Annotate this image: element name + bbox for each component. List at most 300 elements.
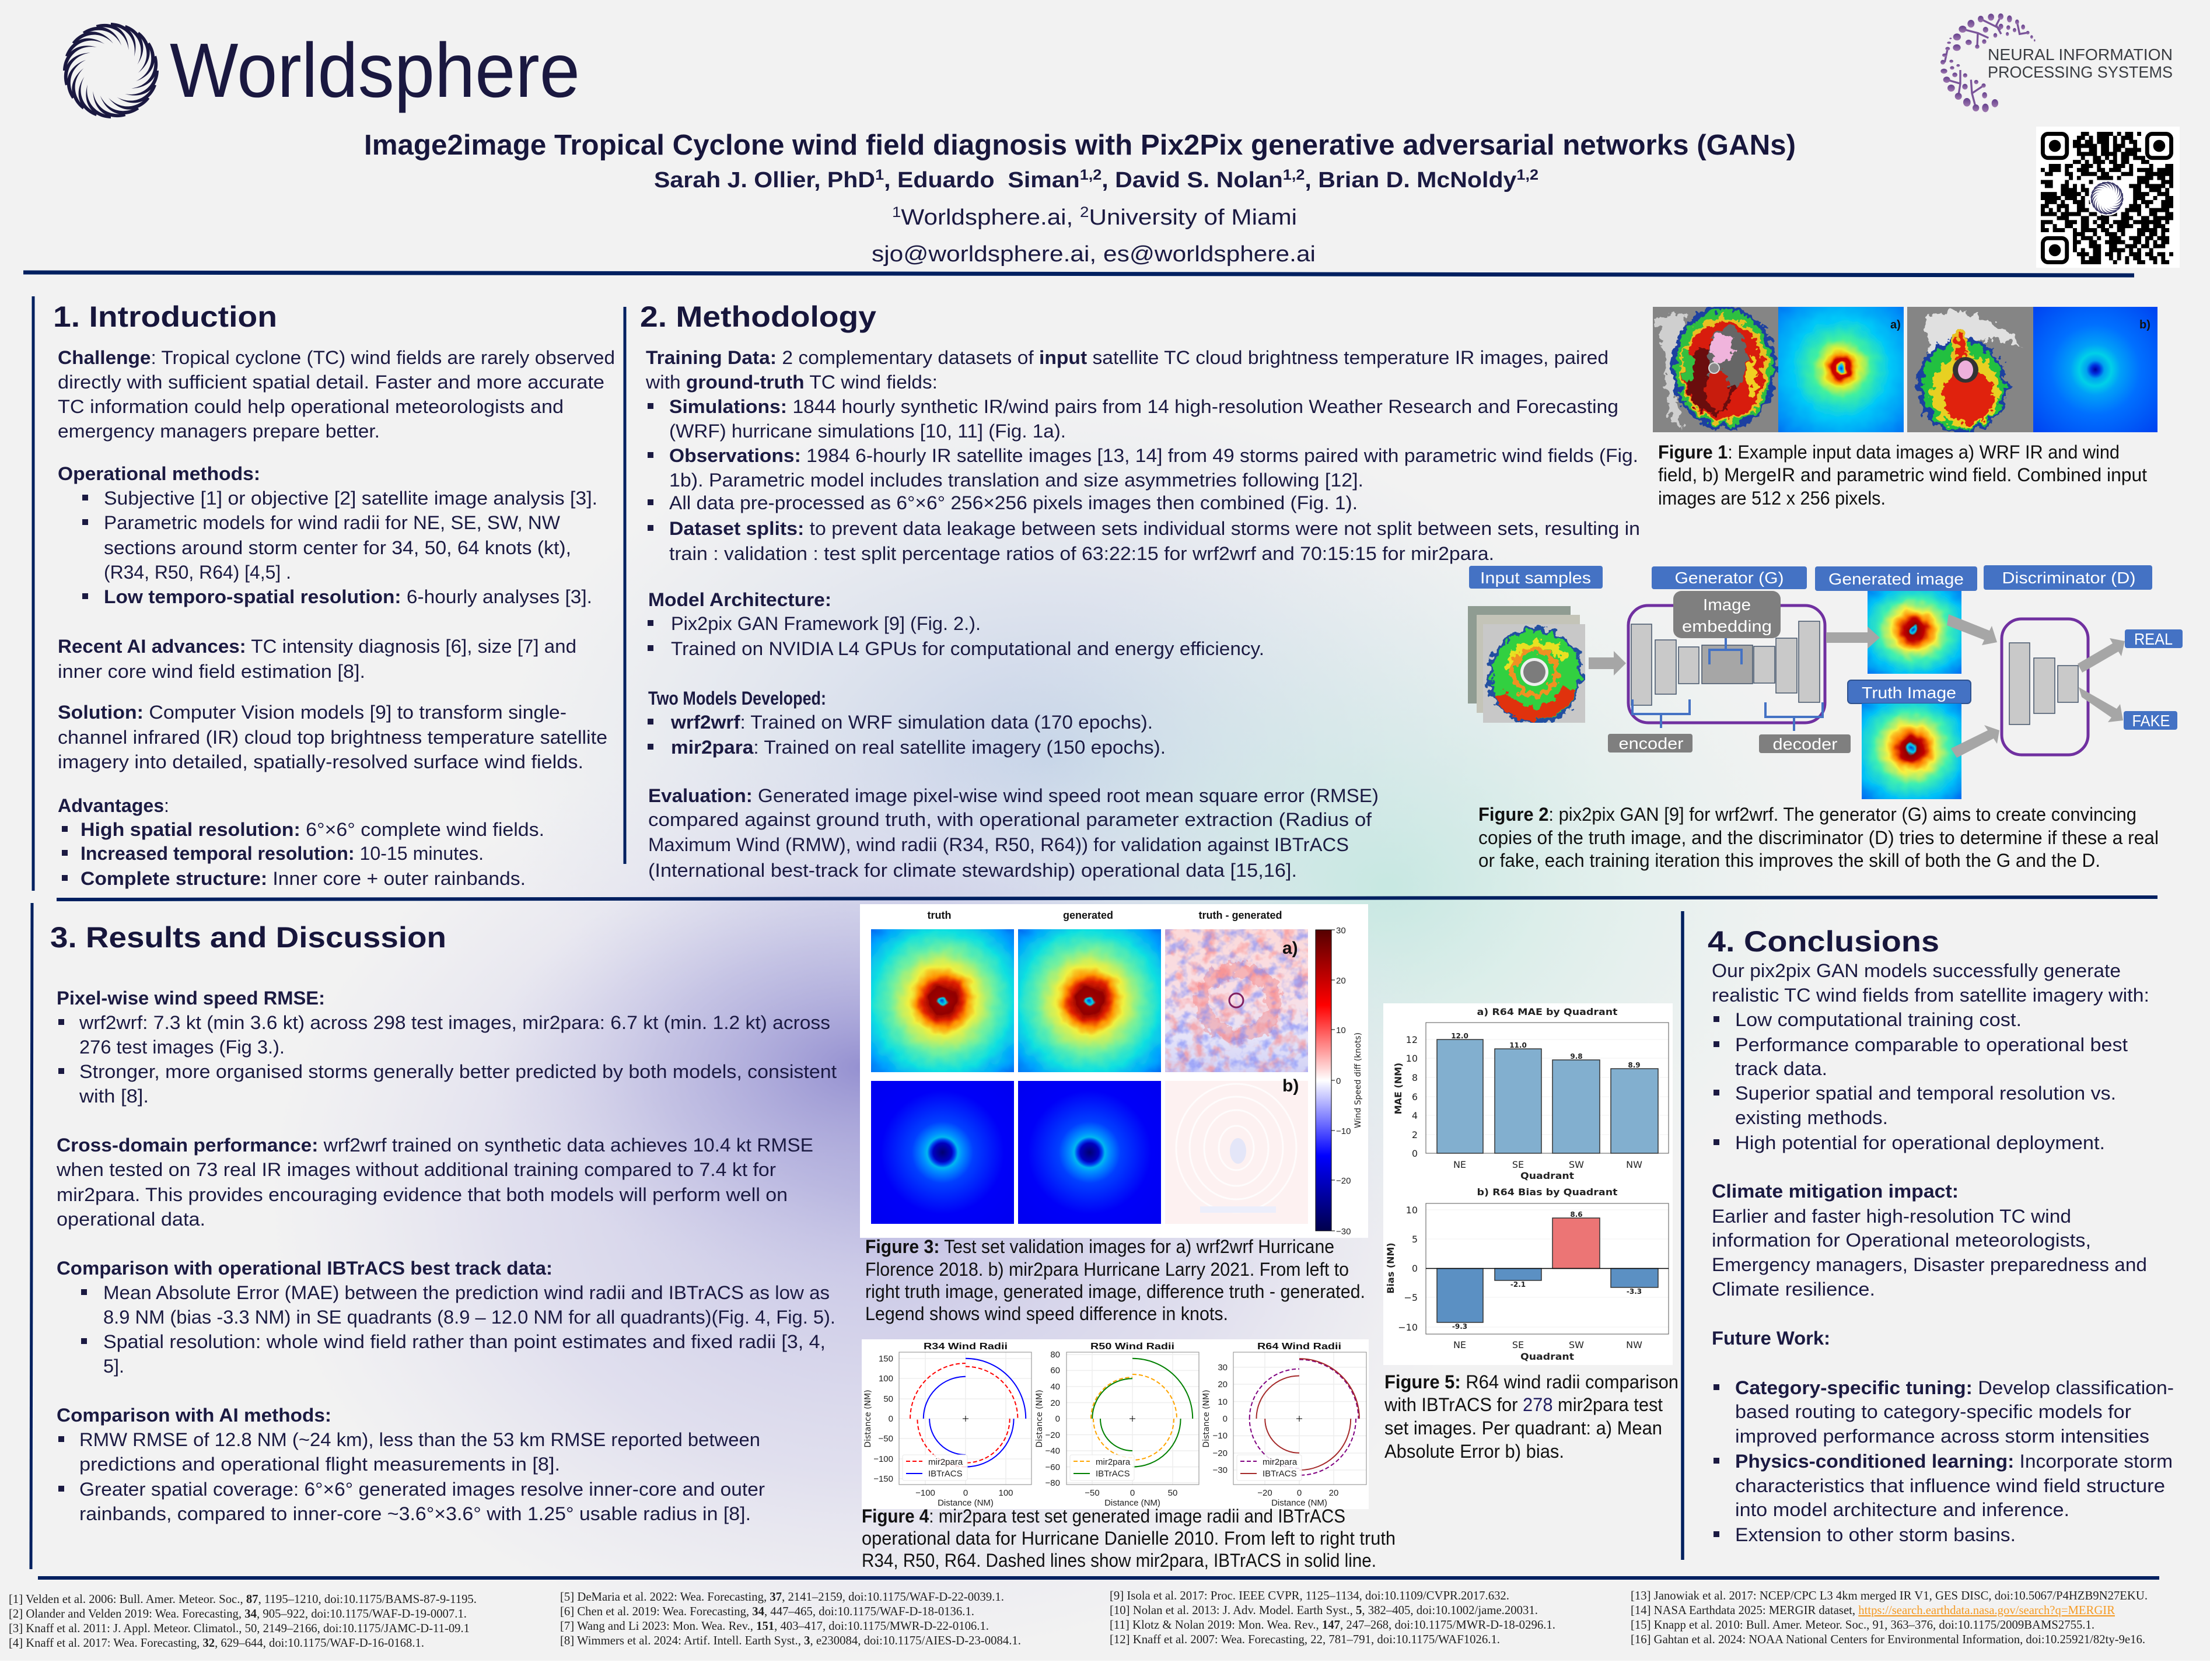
image: input samples stack <box>1468 606 1585 723</box>
text: operational methods: Low temporo-spatial resolution: 6-hourly analyses [3]. <box>104 586 592 607</box>
QR code <box>2036 127 2185 268</box>
image: a) difference <box>1165 929 1308 1072</box>
caption: figure 5: with IBTrACS for 278 mir2para test <box>1384 1394 1663 1415</box>
chart: R34 wind radii: IBTrACS <box>928 1469 963 1479</box>
chart: R64 wind radii: 20 <box>1329 1488 1338 1498</box>
chart: R64 bias by quadrant: 10 <box>1406 1205 1418 1216</box>
caption: figure 2: or fake, each training iteration this improves the skill of both the G and the D. <box>1478 850 2100 871</box>
colorbar: −10 <box>1336 1126 1351 1136</box>
chart: R64 wind radii <box>1202 1342 1366 1508</box>
authors: Sarah J. Ollier, PhD <box>654 168 859 192</box>
label: discriminator: Discriminator (D) <box>2002 569 2135 587</box>
image: a) truth <box>871 929 1014 1072</box>
panel label b: b) <box>1282 1076 1299 1096</box>
text: solution: channel infrared (IR) cloud top brightness temperature satellite <box>58 727 607 748</box>
label: generated image: Generated image <box>1828 570 1964 588</box>
logo: Neural Information Processing Systems: NEURAL INFORMATION <box>1988 46 2173 64</box>
chart: R34 wind radii: 100 <box>879 1374 893 1384</box>
authors: , Brian D. McNoldy <box>1305 168 1516 192</box>
chart: R50 wind radii: 60 <box>1050 1366 1060 1376</box>
references: column 2 <box>560 1590 1021 1647</box>
caption: figure 1: field, b) MergeIR and parametric wind field. Combined input <box>1658 464 2147 485</box>
affiliations: 1 <box>892 204 901 220</box>
chart: R34 wind radii: 0 <box>963 1488 968 1498</box>
text: summary: Low computational training cost. <box>1735 1009 2022 1030</box>
affiliations: 2 <box>1080 204 1089 220</box>
label: image embedding <box>1673 591 1781 638</box>
title: Image2image Tropical Cyclone wind field diagnosis with Pix2Pix generative adversarial networks (GANs) <box>364 130 1796 161</box>
text: future work: Physics-conditioned learning: Incorporate storm <box>1735 1451 2173 1472</box>
image: WRF wind field: a) <box>1890 318 1901 331</box>
chart: R50 wind radii: −50 <box>1085 1488 1100 1498</box>
text: pixel-wise RMSE <box>57 988 837 1107</box>
text: two models <box>648 688 1166 758</box>
text: comparison with AI methods: predictions and operational flight measurements in [8]. <box>79 1454 560 1475</box>
text: operational methods <box>58 463 597 607</box>
chart: R50 wind radii: 20 <box>1050 1398 1060 1408</box>
chart: R64 wind radii: 0 <box>1297 1488 1302 1498</box>
authors: 1 <box>875 167 884 183</box>
chart: R64 MAE by quadrant: 12 <box>1406 1034 1418 1045</box>
text: climate mitigation impact <box>1712 1181 2147 1300</box>
references: column 4 <box>1631 1588 2148 1646</box>
text: challenge <box>58 347 615 442</box>
chart: R64 MAE by quadrant: Quadrant <box>1520 1170 1574 1181</box>
text: pixel-wise RMSE: 276 test images (Fig 3.). <box>79 1037 285 1058</box>
logo: Neural Information Processing Systems <box>1940 13 2173 112</box>
text: summary: Performance comparable to operational best <box>1735 1034 2128 1055</box>
arrow: generator to generated image <box>1826 626 1880 649</box>
text: summary: realistic TC wind fields from satellite imagery with: <box>1712 985 2149 1006</box>
panel label a: a) <box>1282 939 1298 958</box>
references: column 1: [1] Velden et al. 2006: Bull. Amer. Meteor. Soc., 87, 1195–1210, doi:10.1175/BAMS-87-9-1195. <box>9 1592 477 1606</box>
text: climate mitigation impact: information for Operational meteorologists, <box>1712 1230 2091 1251</box>
chart: R64 MAE by quadrant: 10 <box>1406 1053 1418 1064</box>
chart: R64 wind radii: −20 <box>1257 1488 1272 1498</box>
text: comparison with IBTrACS: 5]. <box>103 1356 124 1377</box>
image: parametric wind field: b) <box>2139 318 2150 331</box>
text: cross-domain performance: operational data. <box>57 1209 205 1230</box>
caption: figure 3: Figure 3: Test set validation images for a) wrf2wrf Hurricane <box>865 1236 1334 1257</box>
label: encoder: encoder <box>1618 734 1684 752</box>
chart: R34 wind radii: −100 <box>915 1488 935 1498</box>
text: advantages <box>58 795 544 889</box>
text: training data: Dataset splits: to prevent data leakage between sets individual storms were not split between sets, resulting in <box>669 518 1640 539</box>
text: challenge: TC information could help operational meteorologists and <box>58 396 564 417</box>
chart: R64 MAE by quadrant: 12.0 <box>1451 1032 1468 1040</box>
chart: R64 bias by quadrant: −5 <box>1404 1292 1418 1303</box>
image: b) truth <box>871 1081 1014 1224</box>
chart: R50 wind radii: IBTrACS <box>1096 1469 1130 1479</box>
label: decoder: decoder <box>1772 735 1838 753</box>
text: model architecture <box>648 589 1264 659</box>
text: comparison with IBTrACS: Mean Absolute Error (MAE) between the prediction wind radii and IBTrACS as low as <box>103 1282 830 1303</box>
label: decoder <box>1759 734 1851 753</box>
chart: R64 MAE by quadrant: a) R64 MAE by Quadrant <box>1477 1006 1618 1017</box>
text: training data: All data pre-processed as 6°×6° 256×256 pixels images then combined (Fig. 1). <box>669 492 1358 513</box>
references: column 1: [4] Knaff et al. 2017: Wea. Forecasting, 32, 629–644, doi:10.1175/WAF-D-16-0168.1. <box>9 1636 424 1650</box>
chart: R64 wind radii: 10 <box>1218 1397 1228 1407</box>
chart: R64 bias by quadrant: 5 <box>1412 1234 1418 1245</box>
caption: figure 5: set images. Per quadrant: a) Mean <box>1384 1418 1662 1438</box>
text: training data <box>645 347 1640 564</box>
text: model architecture: Model Architecture: <box>648 589 831 610</box>
chart: R50 wind radii: −20 <box>1045 1430 1060 1440</box>
text: training data: Simulations: 1844 hourly synthetic IR/wind pairs from 14 high-resolution Weather Research and Forecasting <box>669 396 1618 417</box>
text: climate mitigation impact: Climate mitigation impact: <box>1712 1181 1959 1202</box>
text: future work: Future Work: <box>1712 1328 1830 1349</box>
caption: figure 4: operational data for Hurricane Danielle 2010. From left to right truth <box>862 1528 1396 1549</box>
references: column 3: [11] Klotz & Nolan 2019: Mon. Wea. Rev., 147, 247–268, doi:10.1175/MWR-D-18-0296.1. <box>1110 1618 1555 1632</box>
colorbar: 20 <box>1336 976 1346 986</box>
colorbar: 30 <box>1336 926 1346 936</box>
logo: Worldsphere: Worldsphere <box>170 27 580 113</box>
text: future work <box>1712 1328 2174 1545</box>
chart: R64 bias by quadrant <box>1385 1186 1669 1362</box>
caption: figure 5 <box>1384 1371 1679 1462</box>
text: two models: mir2para: Trained on real satellite imagery (150 epochs). <box>671 737 1166 758</box>
text: model architecture: Trained on NVIDIA L4 GPUs for computational and energy efficiency. <box>671 638 1264 659</box>
text: advantages: High spatial resolution: 6°×6° complete wind fields. <box>81 819 544 840</box>
panel: 3. Results and Discussion <box>31 903 837 1569</box>
label: encoder <box>1608 734 1693 752</box>
chart: R64 bias by quadrant: Bias (NM) <box>1385 1242 1396 1294</box>
text: comparison with AI methods: Comparison with AI methods: <box>57 1405 331 1426</box>
chart: R50 wind radii: 0 <box>1055 1414 1060 1424</box>
image: MergeIR <box>1907 307 2033 432</box>
text: comparison with AI methods: rainbands, compared to inner-core ~3.6°×3.6° with 1.25° usable radius in [8]. <box>79 1503 751 1524</box>
text: operational methods: (R34, R50, R64) [4,5] . <box>104 562 291 583</box>
text: training data: with ground-truth TC wind fields: <box>645 372 938 393</box>
panel: 2. Methodology <box>625 300 1640 881</box>
arrow: truth image to discriminator <box>1951 725 1999 758</box>
affiliations: University of Miami <box>1089 205 1297 230</box>
label: truth image <box>1848 680 1971 704</box>
label: generated image <box>1815 566 1977 591</box>
chart: R34 wind radii: −100 <box>873 1454 893 1464</box>
text: operational methods: Subjective [1] or objective [2] satellite image analysis [3]. <box>104 488 597 509</box>
chart: R64 bias by quadrant: -2.1 <box>1510 1280 1526 1289</box>
figure 4: wind radii plots <box>862 1339 1396 1571</box>
chart: R50 wind radii <box>1035 1342 1199 1508</box>
chart: R64 MAE by quadrant: 9.8 <box>1570 1052 1583 1060</box>
logo: Worldsphere <box>58 18 580 124</box>
chart: R50 wind radii: 0 <box>1130 1488 1135 1498</box>
label: truth image: Truth Image <box>1862 684 1956 702</box>
caption: figure 4: R34, R50, R64. Dashed lines show mir2para, IBTrACS in solid line. <box>862 1550 1376 1571</box>
chart: R50 wind radii: mir2para <box>1096 1457 1131 1467</box>
image: generated wind field <box>1868 591 1961 674</box>
authors: 1,2 <box>1516 167 1538 183</box>
chart: R34 wind radii: 150 <box>879 1354 893 1364</box>
arrow: discriminator to real <box>2078 638 2125 673</box>
chart: R64 MAE by quadrant: 11.0 <box>1509 1041 1527 1049</box>
text: climate mitigation impact: Earlier and faster high-resolution TC wind <box>1712 1206 2071 1227</box>
references: column 3 <box>1110 1588 1555 1646</box>
label: real: REAL <box>2134 630 2173 648</box>
text: challenge: directly with sufficient spatial detail. Faster and more accurate <box>58 372 604 393</box>
authors: 1,2 <box>1080 167 1101 183</box>
image: a) generated <box>1018 929 1161 1072</box>
text: operational methods: sections around storm center for 34, 50, 64 knots (kt), <box>104 537 571 558</box>
text: future work: Category-specific tuning: Develop classification- <box>1735 1377 2174 1398</box>
text: training data: train : validation : test split percentage ratios of 63:22:15 for wrf2wrf and 70:15:15 for mir2para. <box>669 543 1494 564</box>
text: climate mitigation impact: Emergency managers, Disaster preparedness and <box>1712 1254 2147 1275</box>
arrow: discriminator to fake <box>2079 687 2123 722</box>
text: challenge: emergency managers prepare better. <box>58 421 380 442</box>
references: column 1: [2] Olander and Velden 2019: Wea. Forecasting, 34, 905–922, doi:10.1175/WAF-D-19-0007.1. <box>9 1606 467 1620</box>
references: column 1: [3] Knaff et al. 2011: J. Appl. Meteor. Climatol., 50, 2149–2166, doi:10.1175/JAMC-D-11-09.1 <box>9 1621 470 1635</box>
chart: R34 wind radii: 0 <box>889 1414 893 1424</box>
caption: figure 4 <box>862 1506 1396 1571</box>
caption: figure 3: right truth image, generated image, difference truth - generated. <box>865 1281 1365 1302</box>
chart: R34 wind radii: Distance (NM) <box>938 1498 994 1508</box>
chart: R64 wind radii: −20 <box>1213 1448 1228 1458</box>
chart: R64 MAE by quadrant: 8 <box>1412 1072 1418 1083</box>
text: summary: Superior spatial and temporal resolution vs. <box>1735 1083 2116 1104</box>
label: fake: FAKE <box>2132 712 2170 730</box>
image: truth wind field <box>1862 704 1961 799</box>
top divider <box>23 272 2134 275</box>
text: comparison with AI methods <box>57 1405 765 1524</box>
logo: Neural Information Processing Systems: PROCESSING SYSTEMS <box>1988 63 2173 81</box>
image: b) difference <box>1165 1081 1308 1224</box>
text: cross-domain performance: mir2para. This provides encouraging evidence that both models will perform well on <box>57 1184 788 1205</box>
chart: R64 wind radii: Distance (NM) <box>1271 1498 1327 1508</box>
colorbar: −20 <box>1336 1176 1351 1186</box>
caption: figure 1 <box>1658 442 2147 509</box>
references: column 3: [12] Knaff et al. 2007: Wea. Forecasting, 22, 781–791, doi:10.1175/WAF1026.1. <box>1110 1632 1500 1646</box>
chart: R34 wind radii: −150 <box>873 1474 893 1484</box>
caption: figure 2: copies of the truth image, and the discriminator (D) tries to determine if these a real <box>1478 827 2159 848</box>
figure 1: example input data images <box>1653 306 2157 509</box>
image: b) generated <box>1018 1081 1161 1224</box>
text: cross-domain performance: when tested on 73 real IR images without additional training compared to 7.4 kt for <box>56 1159 776 1180</box>
heading: Methodology: 2. Methodology <box>640 300 876 333</box>
chart: R64 MAE by quadrant: 6 <box>1412 1091 1418 1102</box>
caption: figure 3 <box>865 1236 1365 1324</box>
text: evaluation: (International best-track for climate stewardship) operational data [15,16]. <box>648 860 1297 881</box>
caption: figure 4: Figure 4: mir2para test set generated image radii and IBTrACS <box>862 1506 1345 1527</box>
figure 3: validation images <box>860 904 1368 1324</box>
text: climate mitigation impact: Climate resilience. <box>1712 1279 1875 1300</box>
bottom divider <box>38 1576 2159 1580</box>
chart: R64 wind radii: IBTrACS <box>1263 1469 1297 1479</box>
text: advantages: Advantages: <box>58 795 169 816</box>
references: column 4: [13] Janowiak et al. 2017: NCEP/CPC L3 4km merged IR V1, GES DISC, doi:10.5067/P4HZB9N27EKU. <box>1631 1588 2148 1602</box>
arrow: input to generator <box>1589 651 1626 676</box>
figure 5: R64 quadrant bars <box>1383 1003 1679 1462</box>
text: evaluation: compared against ground truth, with operational parameter extraction (Radius of <box>648 809 1372 830</box>
text: solution: imagery into detailed, spatially-resolved surface wind fields. <box>58 751 583 772</box>
heading: Introduction: 1. Introduction <box>53 300 277 333</box>
text: training data: Training Data: 2 complementary datasets of input satellite TC cloud brightness temperature IR images, paired <box>646 347 1608 368</box>
generator block <box>1628 591 1825 731</box>
references: column 2: [5] DeMaria et al. 2022: Wea. Forecasting, 37, 2141–2159, doi:10.1175/WAF-D-22-0039.1. <box>560 1590 1004 1604</box>
chart: R64 MAE by quadrant: MAE (NM) <box>1393 1063 1404 1114</box>
text: future work: characteristics that influence wind field structure <box>1735 1475 2165 1496</box>
text: comparison with IBTrACS: Spatial resolution: whole wind field rather than point estimates and fixed radii [3, 4, <box>103 1331 826 1352</box>
colorbar: 10 <box>1336 1026 1346 1035</box>
caption: figure 5: Figure 5: R64 wind radii comparison <box>1384 1371 1679 1392</box>
image: parametric wind field <box>2033 307 2157 432</box>
chart: R64 bias by quadrant: NE <box>1453 1339 1466 1350</box>
chart: R50 wind radii: Distance (NM) <box>1035 1390 1044 1448</box>
panel: 1. Introduction <box>33 296 615 891</box>
colorbar: 0 <box>1336 1076 1341 1086</box>
text: evaluation: Evaluation: Generated image pixel-wise wind speed root mean square error (RMSE) <box>648 785 1379 806</box>
authors: , David S. Nolan <box>1101 168 1283 192</box>
chart: R64 bias by quadrant: SE <box>1512 1339 1524 1350</box>
text: operational methods: Parametric models for wind radii for NE, SE, SW, NW <box>104 512 561 533</box>
references: column 3: [10] Nolan et al. 2013: J. Adv. Model. Earth Syst., 5, 382–405, doi:10.1002/jame.20031. <box>1110 1603 1538 1617</box>
references: column 2: [8] Wimmers et al. 2024: Artif. Intell. Earth Syst., 3, e230084, doi:10.1175/AIES-D-23-0084.1. <box>560 1633 1021 1647</box>
text: challenge: Challenge: Tropical cyclone (TC) wind fields are rarely observed <box>58 347 615 368</box>
text: solution <box>58 702 607 772</box>
text: pixel-wise RMSE: Stronger, more organised storms generally better predicted by both models, consistent <box>79 1061 837 1082</box>
text: summary: track data. <box>1735 1058 1827 1079</box>
chart: R50 wind radii: 80 <box>1050 1350 1060 1360</box>
text: summary: Our pix2pix GAN models successfully generate <box>1712 960 2121 981</box>
chart: R64 MAE by quadrant: 4 <box>1412 1110 1418 1121</box>
chart: R64 bias by quadrant: b) R64 Bias by Quadrant <box>1477 1186 1618 1198</box>
text: future work: improved performance across storm intensities <box>1735 1426 2149 1447</box>
text: future work: into model architecture and inference. <box>1735 1499 2069 1520</box>
references: column 4: [15] Knapp et al. 2010: Bull. Amer. Meteor. Soc., 91, 363–376, doi:10.1175/2009BAMS2755.1. <box>1631 1618 2094 1632</box>
text: comparison with IBTrACS: 8.9 NM (bias -3.3 NM) in SE quadrants (8.9 – 12.0 NM for all quadrants)(Fig. 4, Fig. 5). <box>103 1307 835 1328</box>
text: evaluation <box>648 785 1379 881</box>
text: solution: Solution: Computer Vision models [9] to transform single- <box>58 702 567 723</box>
label: generator: Generator (G) <box>1674 569 1784 587</box>
chart: R64 MAE by quadrant: NW <box>1626 1159 1642 1170</box>
text: operational methods: Operational methods: <box>58 463 260 484</box>
text: comparison with AI methods: RMW RMSE of 12.8 NM (~24 km), less than the 53 km RMSE reported between <box>79 1429 760 1450</box>
text: comparison with IBTrACS: Comparison with operational IBTrACS best track data: <box>57 1258 552 1279</box>
chart: R34 wind radii <box>863 1342 1031 1508</box>
text: recent AI advances <box>58 636 576 682</box>
authors: , Eduardo Siman <box>884 168 1080 192</box>
chart: R64 wind radii: 20 <box>1218 1380 1228 1390</box>
text: model architecture: Pix2pix GAN Framework [9] (Fig. 2.). <box>671 613 981 634</box>
chart: R64 wind radii: mir2para <box>1263 1457 1298 1467</box>
caption: figure 3: Legend shows wind speed difference in knots. <box>865 1303 1228 1324</box>
caption: figure 2: Figure 2: pix2pix GAN [9] for wrf2wrf. The generator (G) aims to create convincing <box>1478 804 2136 825</box>
chart: R64 wind radii: −30 <box>1213 1465 1228 1475</box>
chart: R64 wind radii: 30 <box>1218 1363 1228 1373</box>
chart: R64 MAE by quadrant: 0 <box>1412 1148 1418 1159</box>
text: advantages: Increased temporal resolution: 10-15 minutes. <box>81 843 484 864</box>
chart: R50 wind radii: −40 <box>1045 1446 1060 1456</box>
chart: R64 MAE by quadrant <box>1393 1006 1669 1181</box>
references: column 4: [16] Gahtan et al. 2024: NOAA National Centers for Environmental Information, doi:10.25921/82ty-9e16. <box>1631 1632 2145 1646</box>
caption: figure 5: Absolute Error b) bias. <box>1384 1441 1564 1462</box>
chart: R64 MAE by quadrant: 8.9 <box>1628 1061 1641 1069</box>
chart: R34 wind radii: −50 <box>879 1434 893 1444</box>
text: pixel-wise RMSE: Pixel-wise wind speed RMSE: <box>57 988 325 1009</box>
colorbar <box>1316 926 1363 1237</box>
chart: R64 bias by quadrant: -3.3 <box>1627 1287 1642 1296</box>
figure 2: pix2pix GAN diagram <box>1468 565 2183 871</box>
references: column 3: [9] Isola et al. 2017: Proc. IEEE CVPR, 1125–1134, doi:10.1109/CVPR.2017.632. <box>1110 1588 1509 1602</box>
contact emails: sjo@worldsphere.ai, es@worldsphere.ai <box>872 242 1316 267</box>
text: two models: wrf2wrf: Trained on WRF simulation data (170 epochs). <box>670 712 1153 733</box>
icon: Worldsphere swirl <box>58 18 164 124</box>
chart: R64 bias by quadrant: SW <box>1569 1339 1584 1350</box>
caption: figure 1: Figure 1: Example input data images a) WRF IR and wind <box>1658 442 2120 463</box>
text: summary: High potential for operational deployment. <box>1735 1132 2105 1153</box>
caption: figure 2 <box>1478 804 2159 871</box>
text: summary <box>1712 960 2149 1153</box>
image: WRF IR <box>1653 307 1778 432</box>
chart: R34 wind radii: 50 <box>883 1394 893 1404</box>
heading: Results and Discussion: 3. Results and Discussion <box>50 921 446 954</box>
caption: figure 3: Florence 2018. b) mir2para Hurricane Larry 2021. From left to <box>865 1259 1349 1280</box>
colorbar: −30 <box>1336 1227 1351 1237</box>
text: future work: based routing to category-specific models for <box>1735 1401 2131 1422</box>
chart: R64 MAE by quadrant: 2 <box>1412 1129 1418 1140</box>
chart: R50 wind radii: Distance (NM) <box>1104 1498 1160 1508</box>
image: WRF wind field <box>1778 307 1904 432</box>
chart: R34 wind radii: mir2para <box>928 1457 963 1467</box>
affiliations: Worldsphere.ai, <box>901 205 1080 230</box>
chart: R34 wind radii: 100 <box>998 1488 1013 1498</box>
text: pixel-wise RMSE: with [8]. <box>79 1086 149 1107</box>
middle divider <box>57 897 2157 900</box>
text: training data: (WRF) hurricane simulations [10, 11] (Fig. 1a). <box>669 421 1066 442</box>
column labels: truth <box>928 909 951 921</box>
text: recent AI advances: inner core wind field estimation [8]. <box>58 661 365 682</box>
chart: R50 wind radii: −80 <box>1045 1478 1060 1488</box>
references: column 4: [14] NASA Earthdata 2025: MERGIR dataset, https://search.earthdata.nasa.gov/search?q=MERGIR <box>1631 1603 2115 1617</box>
label: generator <box>1652 566 1807 589</box>
text: advantages: Complete structure: Inner core + outer rainbands. <box>81 868 526 889</box>
label: input samples <box>1469 566 1603 589</box>
authors: 1,2 <box>1283 167 1305 183</box>
heading: Conclusions: 4. Conclusions <box>1708 925 1939 958</box>
text: summary: existing methods. <box>1735 1107 1888 1128</box>
chart: R50 wind radii: R50 Wind Radii <box>1090 1342 1174 1352</box>
chart: R64 bias by quadrant: −10 <box>1398 1322 1418 1333</box>
chart: R64 wind radii: 0 <box>1223 1414 1228 1424</box>
column labels: truth - generated <box>1198 909 1282 921</box>
chart: R34 wind radii: Distance (NM) <box>863 1390 873 1448</box>
chart: R64 bias by quadrant: NW <box>1626 1339 1642 1350</box>
chart: R64 wind radii: −10 <box>1213 1431 1228 1441</box>
column labels <box>928 909 1282 921</box>
text: cross-domain performance <box>56 1135 813 1230</box>
chart: R64 MAE by quadrant: NE <box>1453 1159 1466 1170</box>
panel: 4. Conclusions <box>1683 911 2174 1560</box>
caption: figure 1: images are 512 x 256 pixels. <box>1658 488 1886 509</box>
chart: R50 wind radii: 40 <box>1050 1382 1060 1392</box>
label: image embedding: Image <box>1703 596 1751 614</box>
references: column 2: [7] Wang and Li 2023: Mon. Wea. Rev., 151, 403–417, doi:10.1175/MWR-D-22-0106.1. <box>560 1619 989 1633</box>
label: input samples: Input samples <box>1480 569 1591 587</box>
chart: R50 wind radii: −60 <box>1045 1462 1060 1472</box>
text: evaluation: Maximum Wind (RMW), wind radii (R34, R50, R64)) for validation against IBTrACS <box>648 834 1349 855</box>
chart: R64 MAE by quadrant: SW <box>1569 1159 1584 1170</box>
text: comparison with AI methods: Greater spatial coverage: 6°×6° generated images resolve inner-core and outer <box>79 1479 765 1500</box>
chart: R64 MAE by quadrant: SE <box>1512 1159 1524 1170</box>
chart: R64 wind radii: Distance (NM) <box>1202 1390 1211 1448</box>
chart: R64 bias by quadrant: 8.6 <box>1570 1210 1583 1219</box>
references: column 2: [6] Chen et al. 2019: Wea. Forecasting, 34, 447–465, doi:10.1175/WAF-D-18-0136.1. <box>560 1604 974 1618</box>
chart: R50 wind radii: 50 <box>1168 1488 1177 1498</box>
text: cross-domain performance: Cross-domain performance: wrf2wrf trained on synthetic data achieves 10.4 kt RMSE <box>57 1135 813 1156</box>
text: recent AI advances: Recent AI advances: TC intensity diagnosis [6], size [7] and <box>58 636 576 657</box>
references: column 1 <box>9 1592 477 1650</box>
column labels: generated <box>1063 909 1113 921</box>
